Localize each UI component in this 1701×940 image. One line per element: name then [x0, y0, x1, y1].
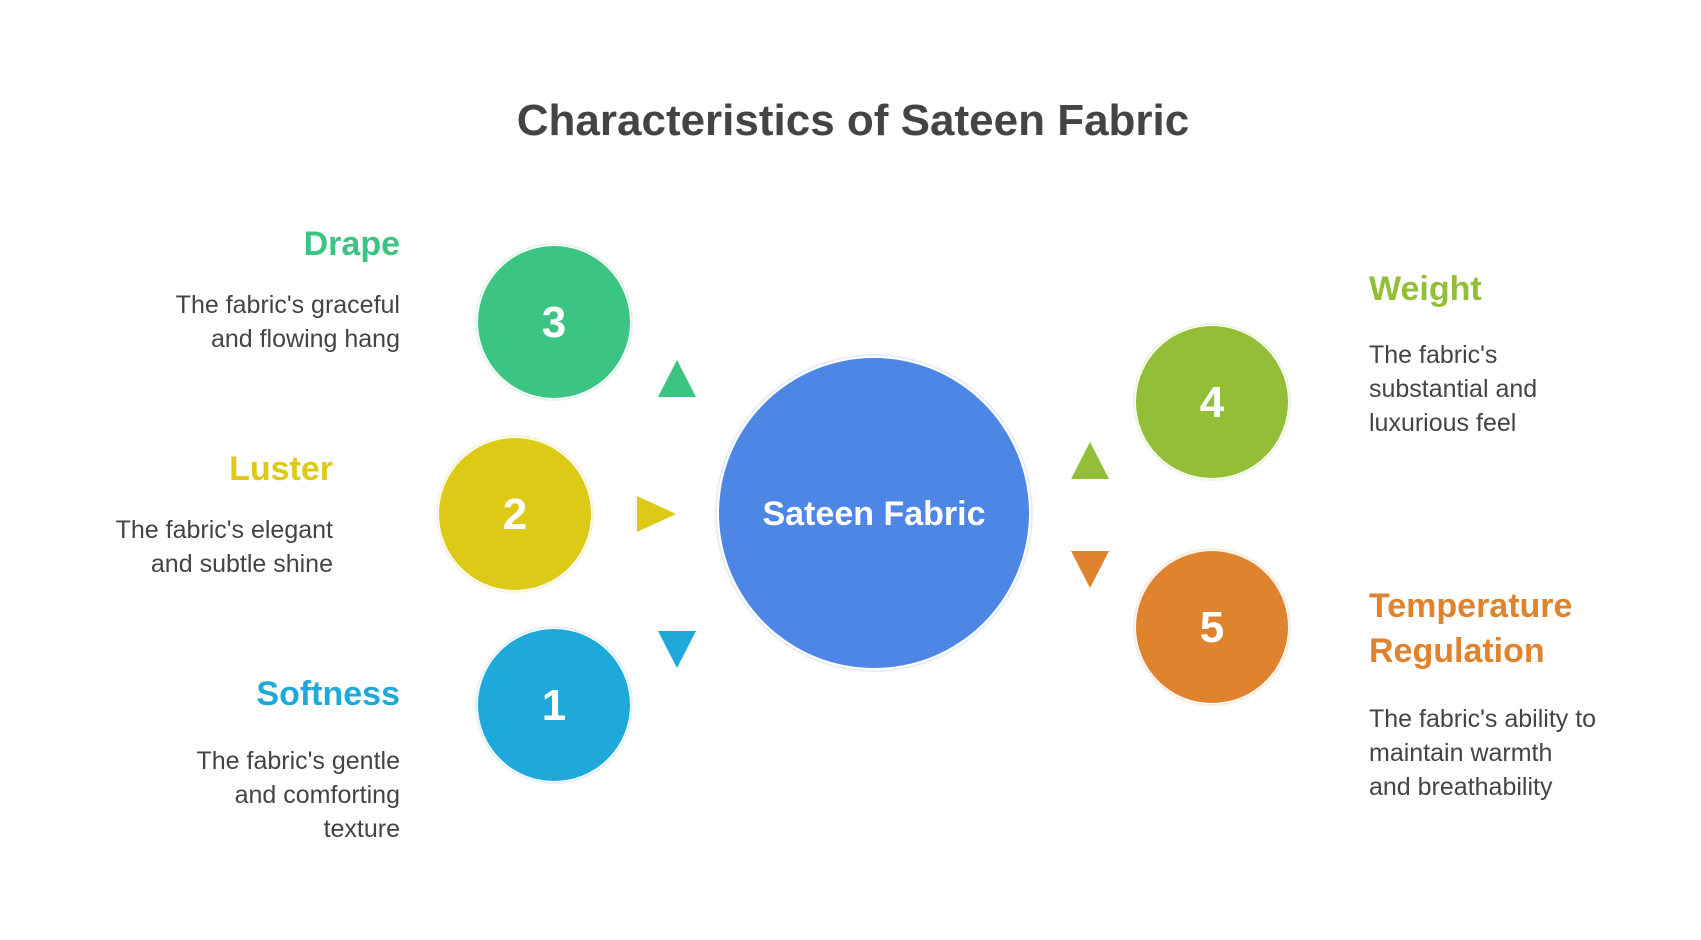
circle 3 [476, 244, 632, 400]
circle 2 [437, 436, 593, 592]
center circle: Sateen Fabric [763, 495, 985, 533]
label: Temperature Regulation: maintain warmth [1369, 739, 1552, 767]
label: Softness [196, 675, 400, 843]
circle 1 [476, 627, 632, 783]
arrow: blue down [658, 631, 696, 668]
label: Softness: Softness [256, 675, 400, 713]
label: Drape: Drape [304, 225, 400, 263]
label: Weight [1369, 270, 1537, 437]
label: Weight: The fabric's [1369, 341, 1497, 369]
circle 4: 4 [1200, 378, 1225, 427]
label: Softness: and comforting [235, 781, 400, 809]
label: Weight: substantial and [1369, 375, 1537, 403]
label: Temperature Regulation: Regulation [1369, 632, 1545, 670]
label: Softness: The fabric's gentle [196, 747, 400, 775]
label: Temperature Regulation [1369, 587, 1596, 801]
label: Temperature Regulation: The fabric's ability to [1369, 705, 1596, 733]
circle 1: 1 [542, 681, 566, 730]
label: Drape: The fabric's graceful [176, 291, 400, 319]
circle 2: 2 [503, 490, 527, 539]
label: Drape: and flowing hang [211, 325, 400, 353]
arrow: lime up [1071, 442, 1109, 479]
arrow: yellow right [637, 496, 676, 532]
label: Weight: luxurious feel [1369, 409, 1516, 437]
circle 4 [1134, 324, 1290, 480]
arrow: green up [658, 360, 696, 397]
label: Luster [116, 450, 333, 578]
circle 5 [1134, 549, 1290, 705]
circle 3: 3 [542, 298, 566, 347]
label: Luster: The fabric's elegant [116, 516, 333, 544]
arrow: orange down [1071, 551, 1109, 588]
label: Weight: Weight [1369, 270, 1482, 308]
label: Luster: Luster [229, 450, 333, 488]
label: Luster: and subtle shine [151, 550, 333, 578]
label: Temperature Regulation: Temperature [1369, 587, 1572, 625]
title: Characteristics of Sateen Fabric [517, 96, 1189, 145]
label: Temperature Regulation: and breathability [1369, 773, 1552, 801]
circle 5: 5 [1200, 603, 1224, 652]
center circle [716, 355, 1032, 671]
label: Drape [176, 225, 400, 353]
label: Softness: texture [324, 815, 400, 843]
